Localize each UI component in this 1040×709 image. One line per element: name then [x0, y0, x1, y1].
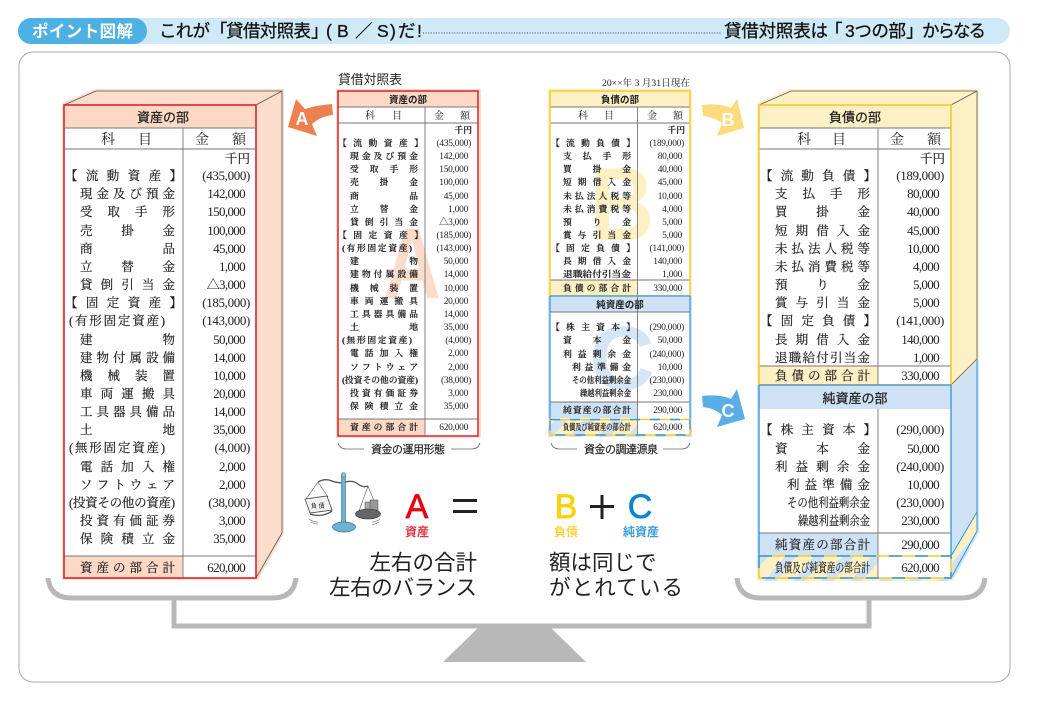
rows: net assets: 50,000	[658, 336, 683, 346]
rows: (投資その他の資産)	[69, 495, 175, 510]
rows: 工具器具備品	[80, 405, 175, 419]
heading right	[724, 21, 986, 41]
equals sign	[453, 499, 477, 513]
column heads: 科目	[365, 109, 402, 122]
big table: 資産の部	[62, 89, 284, 580]
rows: 建物	[80, 332, 175, 347]
rows: net assets: 50,000	[907, 441, 939, 456]
rows: 【流動資産】	[65, 168, 182, 183]
caption: 資金の運用形態: 資金の運用形態	[371, 443, 445, 456]
rows: 電話加入権	[350, 347, 418, 358]
column heads	[101, 131, 247, 148]
small table: 資産の部	[336, 89, 481, 438]
rows: liabilities: 負債の部合計	[775, 368, 870, 383]
rows: 20,000	[444, 297, 469, 307]
rows: (投資その他の資産)	[342, 374, 418, 385]
rows: 受取手形	[350, 163, 418, 174]
rows: 売掛金	[80, 223, 175, 238]
rows: 100,000	[439, 178, 469, 188]
rows: liabilities: 1,000	[913, 350, 939, 365]
rows: ソフトウェア	[80, 478, 175, 492]
rows: liabilities: (141,000)	[650, 243, 684, 254]
rows: net assets: 繰越利益剰余金	[580, 387, 631, 398]
rows: net assets: 利益準備金	[787, 477, 870, 492]
rows: (143,000)	[202, 313, 250, 328]
rows: 立替金	[80, 259, 175, 274]
rows: 千円	[454, 124, 472, 135]
rows: 立替金	[350, 203, 418, 214]
rows: (有形固定資産)	[69, 313, 165, 328]
rows: liabilities	[551, 124, 685, 294]
rows: 車両運搬具	[350, 295, 419, 306]
rows: liabilities: 【固定負債】	[760, 313, 876, 328]
rows: 150,000	[439, 165, 469, 175]
rows: (無形固定資産)	[69, 440, 165, 455]
heading left: B	[337, 21, 349, 41]
text: right statement	[549, 551, 683, 600]
letter A: A	[406, 488, 429, 526]
rows: net assets: 資本金	[775, 441, 870, 456]
rows: 20,000	[213, 386, 245, 401]
rows: 機械装置	[350, 282, 418, 293]
heading right: 「	[825, 21, 842, 41]
heading left: 「	[210, 21, 228, 41]
arrow C: C	[722, 401, 734, 421]
rows: 35,000	[444, 402, 469, 412]
rows: 2,000	[219, 459, 245, 474]
rows: △3,000	[439, 217, 469, 228]
icon: balance scale	[305, 473, 380, 532]
text: left statement	[329, 551, 477, 600]
rows: 現金及び預金	[350, 150, 418, 161]
heading left: !	[417, 21, 422, 41]
rows: (4,000)	[215, 440, 250, 455]
small table: 負債の部 and 純資産の部	[548, 89, 692, 437]
rows: net assets	[760, 422, 944, 575]
rows: liabilities: (189,000)	[896, 168, 944, 183]
column heads: 金額	[195, 131, 247, 148]
rows: liabilities: 5,000	[913, 277, 939, 292]
rows: net assets: (290,000)	[650, 322, 684, 333]
rows: 3,000	[219, 513, 245, 528]
rows: 14,000	[213, 404, 245, 419]
column heads: 金額	[647, 109, 684, 122]
rows: liabilities: 【流動負債】	[760, 168, 876, 183]
rows: net assets: 純資産の部合計	[775, 537, 870, 552]
header text: 純資産の部: 純資産の部	[822, 391, 888, 406]
rows: liabilities: 40,000	[658, 165, 683, 175]
rows: net assets: 10,000	[907, 477, 939, 492]
rows: (無形固定資産)	[342, 334, 412, 345]
rows: liabilities: 負債の部合計	[563, 282, 631, 293]
rows: 商品	[350, 190, 418, 201]
heading left: これが	[159, 21, 210, 41]
rows: 売掛金	[350, 176, 418, 187]
rows: net assets: 純資産の部合計	[563, 404, 631, 415]
heading left: )	[390, 21, 396, 41]
rows: liabilities: 退職給付引当金	[563, 268, 631, 279]
rows: 千円	[225, 152, 250, 166]
watermark A: A	[383, 209, 441, 320]
caption: 資金の調達源泉	[551, 442, 690, 456]
rows: liabilities: 預り金	[775, 277, 870, 292]
header text: 資産の部	[389, 94, 427, 106]
rows: ソフトウェア	[350, 362, 418, 372]
rows: liabilities: 退職給付引当金	[775, 350, 870, 365]
heading left: (	[326, 21, 332, 41]
rows: △3,000	[207, 277, 245, 292]
rows: net assets: 利益準備金	[572, 361, 631, 372]
rows: 10,000	[444, 284, 469, 294]
badge: ポイント図解: ポイント図解	[32, 21, 134, 41]
icon: balance scale: 負 債	[311, 502, 325, 510]
rows: 142,000	[439, 152, 469, 162]
watermark C: C	[590, 309, 654, 409]
rows: liabilities: (141,000)	[896, 313, 944, 328]
rows: (143,000)	[437, 243, 471, 254]
rows: liabilities: 未払法人税等	[563, 190, 631, 201]
rows: net assets: (240,000)	[896, 459, 944, 474]
rows: liabilities: 80,000	[658, 152, 683, 162]
rows: liabilities: 4,000	[913, 259, 939, 274]
rows: liabilities: 4,000	[662, 205, 683, 215]
letter B: B	[555, 488, 577, 526]
header banner	[18, 18, 1010, 44]
rows: net assets: 【株主資本】	[760, 422, 876, 437]
rows: 建物付属設備	[80, 350, 175, 365]
rows: 35,000	[444, 323, 469, 333]
rows: net assets: (290,000)	[896, 422, 944, 437]
rows: liabilities: 45,000	[907, 223, 939, 238]
badge: ポイント図解	[18, 18, 147, 44]
rows: (435,000)	[202, 168, 250, 183]
text: left statement: 左右の合計	[369, 551, 477, 575]
rows: (185,000)	[202, 295, 250, 310]
rows: net assets: その他利益剰余金	[572, 374, 631, 385]
rows: liabilities: 140,000	[653, 257, 683, 267]
rows: 620,000	[207, 560, 245, 575]
rows: 工具器具備品	[350, 308, 418, 319]
rows: liabilities: 千円	[667, 124, 685, 135]
rows: net assets: 290,000	[653, 406, 683, 416]
heading right: からなる	[922, 21, 986, 41]
rows: 土地	[350, 321, 418, 332]
title: 貸借対照表: 貸借対照表	[338, 72, 402, 87]
heading left: 貸借対照表	[226, 21, 311, 41]
rows: 2,000	[448, 363, 469, 373]
rows: net assets	[551, 321, 684, 433]
rows: liabilities: 1,000	[662, 270, 683, 280]
rows: liabilities: 支払手形	[563, 150, 631, 161]
text: left statement: 左右のバランス	[329, 576, 477, 600]
rows: liabilities: 【流動負債】	[551, 137, 635, 148]
rows: liabilities: 未払消費税等	[563, 203, 631, 214]
heading right: 3つの部	[845, 21, 906, 41]
rows: liabilities: 5,000	[913, 295, 939, 310]
rows: net assets: 利益剰余金	[563, 348, 631, 359]
rows: liabilities: 10,000	[658, 192, 683, 202]
rows: 14,000	[444, 310, 469, 320]
rows: 14,000	[444, 270, 469, 280]
column heads: 科目	[101, 131, 152, 148]
rows: net assets: 620,000	[901, 560, 939, 575]
heading right: 貸借対照表は	[724, 21, 828, 41]
caption: 資金の運用形態	[338, 443, 480, 456]
column heads	[365, 109, 471, 122]
heading left: ／	[355, 21, 372, 41]
rows: net assets: 負債及び純資産の部合計	[775, 560, 870, 575]
caption: 資金の調達源泉: 資金の調達源泉	[584, 442, 658, 456]
rows: net assets: 290,000	[901, 537, 939, 552]
rows: 受取手形	[80, 205, 175, 219]
text: right statement: 額は同じで	[549, 551, 657, 575]
rows: liabilities: 【固定負債】	[551, 242, 635, 253]
rows: 142,000	[207, 186, 245, 201]
heading left	[159, 21, 422, 41]
rows: 投資有価証券	[350, 387, 418, 398]
rows: 資産の部合計	[350, 421, 418, 432]
rows: liabilities: 未払法人税等	[775, 241, 870, 256]
column heads	[578, 109, 684, 122]
letter A: 資産	[405, 524, 429, 539]
column heads: 科目	[797, 131, 846, 148]
rows: (有形固定資産)	[342, 242, 412, 253]
rows: liabilities: 千円	[920, 152, 945, 166]
rows: liabilities: 5,000	[662, 218, 683, 228]
rows: liabilities: 330,000	[901, 368, 939, 383]
rows: net assets: 10,000	[658, 363, 683, 373]
rows: net assets: 負債及び純資産の部合計	[563, 421, 631, 432]
rows: 2,000	[448, 349, 469, 359]
rows: 1,000	[219, 259, 245, 274]
text: right statement: がとれている	[549, 576, 683, 600]
rows: 150,000	[207, 204, 245, 219]
header text: 純資産の部: 純資産の部	[596, 299, 644, 311]
header text: 負債の部	[601, 94, 639, 106]
rows: (38,000)	[208, 495, 250, 510]
rows: liabilities: 5,000	[662, 231, 683, 241]
header text: 負債の部	[829, 110, 881, 125]
rows: 電話加入権	[80, 459, 175, 474]
rows: 45,000	[213, 241, 245, 256]
rows: net assets: その他利益剰余金	[787, 495, 870, 510]
column heads: 金額	[434, 109, 471, 122]
rows: 資産の部合計	[80, 560, 175, 575]
heading right: 」	[906, 21, 924, 41]
rows: 保険積立金	[80, 531, 175, 546]
letter C: 純資産	[623, 524, 659, 539]
rows: net assets: 230,000	[653, 389, 683, 399]
rows: net assets: 利益剰余金	[775, 459, 870, 474]
rows: liabilities: 未払消費税等	[775, 259, 870, 274]
rows: net assets: 620,000	[653, 423, 683, 433]
rows: net assets: 繰越利益剰余金	[798, 513, 870, 528]
rows: 現金及び預金	[80, 186, 175, 201]
rows: 50,000	[213, 332, 245, 347]
rows: 【流動資産】	[338, 137, 423, 148]
rows: liabilities: (189,000)	[650, 138, 684, 149]
rows: (38,000)	[441, 375, 471, 386]
rows: liabilities: 賞与引当金	[775, 295, 870, 310]
header text: 資産の部	[137, 110, 189, 125]
rows: liabilities: 80,000	[907, 186, 939, 201]
rows	[65, 152, 250, 575]
rows: 貸倒引当金	[80, 277, 175, 292]
rows: 35,000	[213, 531, 245, 546]
rows: 45,000	[444, 192, 469, 202]
letter C	[623, 488, 659, 539]
rows: (435,000)	[437, 138, 471, 149]
rows: 35,000	[213, 422, 245, 437]
rows: liabilities: 短期借入金	[563, 176, 631, 187]
rows: liabilities: 短期借入金	[775, 223, 870, 238]
rows: 2,000	[219, 477, 245, 492]
rows: (4,000)	[445, 335, 471, 346]
rows: net assets: 資本金	[563, 334, 631, 345]
rows: 商品	[80, 242, 175, 256]
rows: 【固定資産】	[338, 229, 423, 240]
rows: net assets: 230,000	[901, 513, 939, 528]
watermark B: B	[590, 147, 654, 263]
equation: A = B + C	[405, 488, 659, 539]
rows: net assets: (230,000)	[896, 495, 944, 510]
plus sign	[590, 495, 614, 519]
rows: 10,000	[213, 368, 245, 383]
letter B: 負債	[554, 524, 578, 539]
rows: 1,000	[448, 205, 469, 215]
rows: 建物付属設備	[350, 268, 418, 279]
column heads: 科目	[578, 109, 614, 122]
rows: liabilities	[760, 152, 945, 383]
arrow A	[288, 99, 333, 136]
big table: 負債の部 and 純資産の部	[757, 89, 979, 581]
rows: 【固定資産】	[65, 295, 182, 310]
rows: liabilities: 140,000	[901, 332, 939, 347]
rows: liabilities: 40,000	[907, 204, 939, 219]
rows: liabilities: 長期借入金	[775, 332, 870, 347]
column heads	[797, 131, 942, 148]
heading left: S	[377, 21, 389, 41]
arrow C	[702, 389, 745, 427]
rows: 投資有価証券	[80, 513, 175, 528]
rows: net assets: (240,000)	[650, 349, 684, 360]
rows: 620,000	[439, 423, 469, 433]
heading left: 」	[311, 21, 328, 41]
arrow B: B	[722, 110, 734, 130]
arrow B	[702, 99, 744, 136]
rows: liabilities: 長期借入金	[563, 255, 631, 266]
rows: (185,000)	[437, 230, 471, 241]
rows: 土地	[80, 422, 175, 437]
arrow A: A	[296, 109, 308, 129]
rows: 100,000	[207, 223, 245, 238]
rows: 3,000	[448, 389, 469, 399]
heading left: だ	[398, 21, 416, 41]
rows: liabilities: 預り金	[563, 216, 631, 227]
rows: 貸倒引当金	[350, 216, 418, 227]
rows: 14,000	[213, 350, 245, 365]
rows: liabilities: 支払手形	[775, 186, 870, 201]
rows: 保険積立金	[350, 400, 418, 411]
rows: liabilities: 買掛金	[563, 163, 631, 174]
rows: liabilities: 45,000	[658, 178, 683, 188]
letter C: C	[628, 488, 652, 526]
rows: liabilities: 330,000	[653, 284, 683, 294]
rows: net assets: 【株主資本】	[551, 321, 635, 332]
rows: 50,000	[444, 257, 469, 267]
rows: liabilities: 買掛金	[775, 204, 870, 219]
rows: liabilities: 賞与引当金	[563, 229, 631, 240]
rows: 車両運搬具	[80, 386, 175, 401]
rows	[338, 124, 472, 433]
rows: liabilities: 10,000	[907, 241, 939, 256]
bracket connector	[48, 578, 985, 662]
column heads: 金額	[890, 131, 942, 148]
rows: net assets: (230,000)	[650, 375, 684, 386]
rows: 機械装置	[80, 368, 175, 383]
date: 20××年 3 月31日現在	[602, 77, 690, 89]
rows: 建物	[350, 255, 418, 266]
